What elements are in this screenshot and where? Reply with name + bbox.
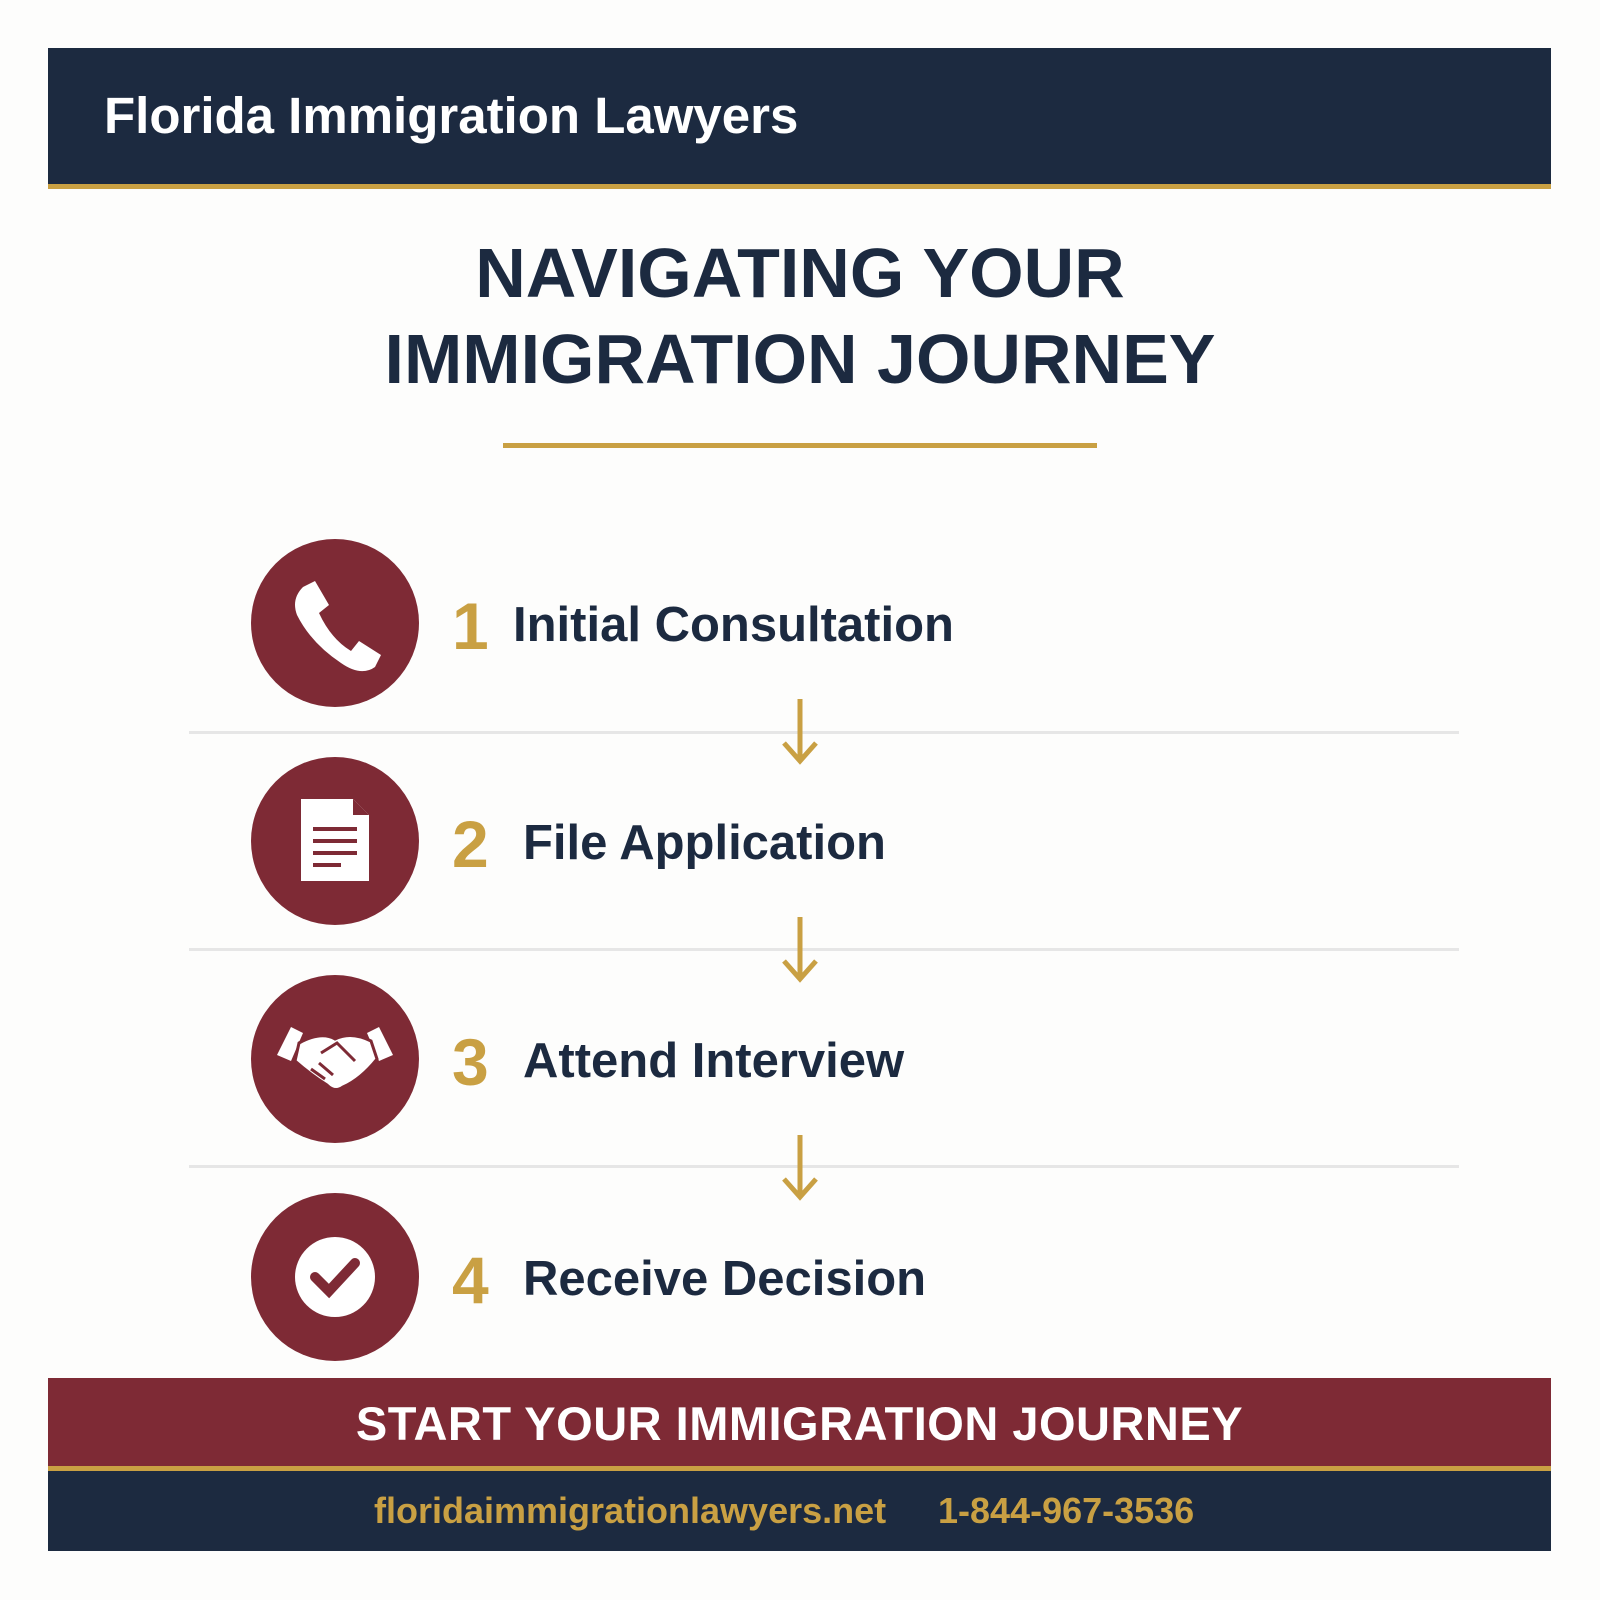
arrow 2: [782, 917, 818, 983]
footer contact bar: [48, 1471, 1551, 1551]
step 2: [251, 757, 886, 925]
title: IMMIGRATION JOURNEY: [385, 320, 1215, 398]
website: floridaimmigrationlawyers.net: [374, 1490, 886, 1531]
header bar: [48, 48, 1551, 189]
step 4: [251, 1193, 926, 1361]
icon: document: [251, 757, 419, 925]
step 4: 4: [452, 1243, 489, 1317]
CTA bar: [48, 1378, 1551, 1471]
step 3: Attend Interview: [523, 1034, 904, 1088]
arrow 3: [782, 1135, 818, 1201]
step 2: 2: [452, 807, 489, 881]
icon: handshake: [251, 975, 419, 1143]
icon: phone: [251, 539, 419, 707]
arrow 1: [782, 699, 818, 765]
step 1: Initial Consultation: [513, 598, 954, 652]
step 3: 3: [452, 1025, 489, 1099]
header text: Florida Immigration Lawyers: [104, 87, 798, 144]
title underline: [503, 443, 1097, 448]
icon: check: [251, 1193, 419, 1361]
title: NAVIGATING YOUR: [475, 234, 1125, 312]
step 2: File Application: [523, 816, 886, 870]
step 1: [251, 539, 954, 707]
phone: 1-844-967-3536: [938, 1490, 1194, 1531]
CTA text: START YOUR IMMIGRATION JOURNEY: [356, 1397, 1243, 1450]
step 1: 1: [452, 589, 489, 663]
step 3: [251, 975, 904, 1143]
title: [385, 234, 1215, 398]
step 4: Receive Decision: [523, 1252, 926, 1306]
